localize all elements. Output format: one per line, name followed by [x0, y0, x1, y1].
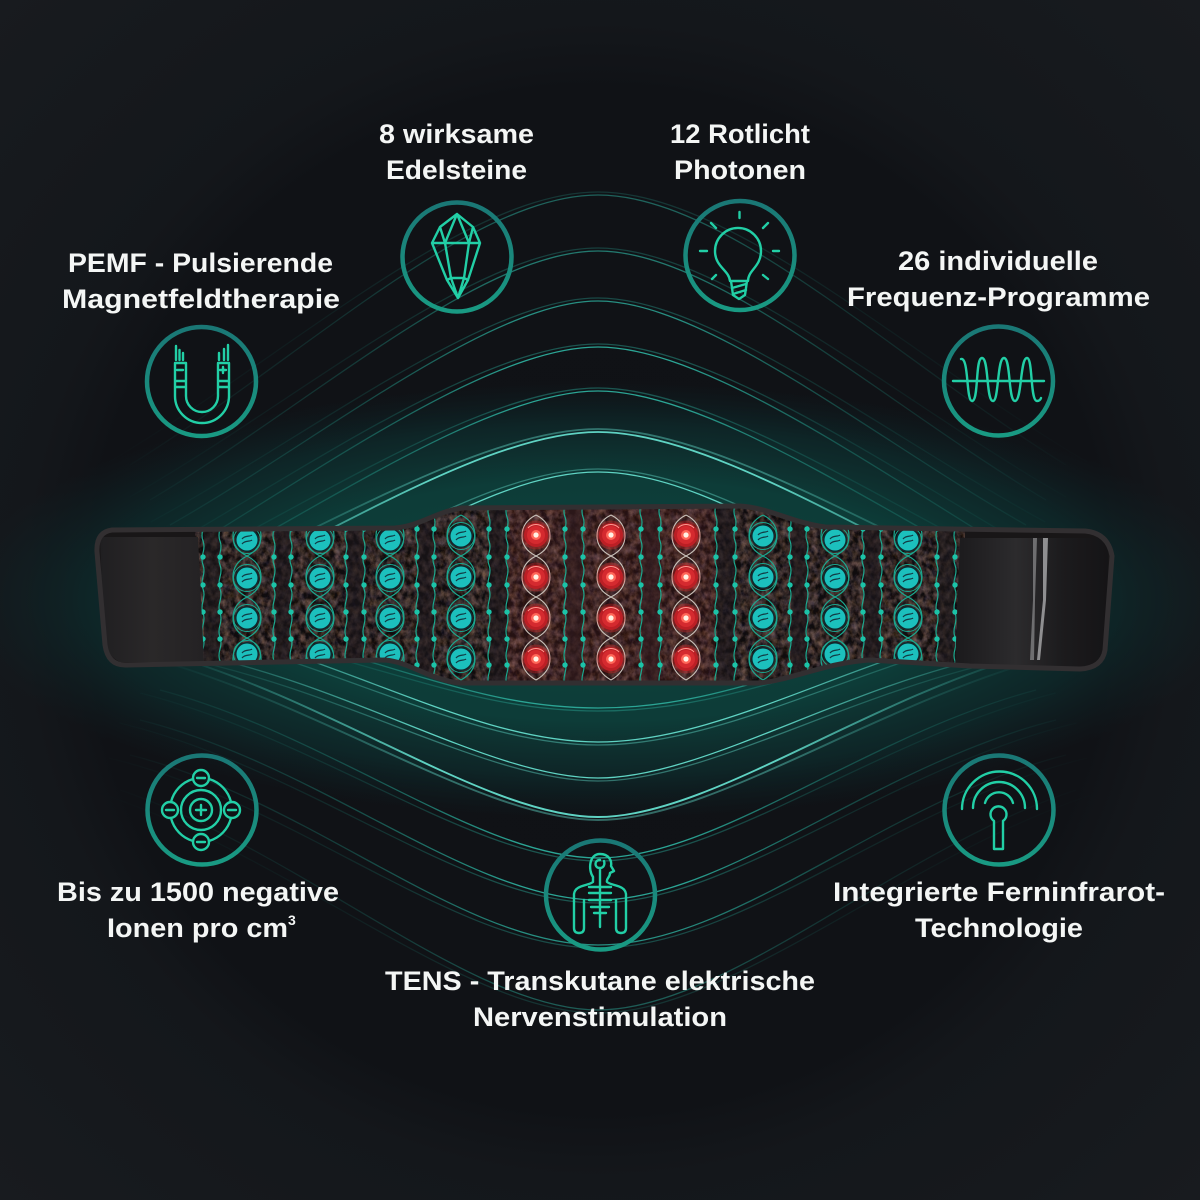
heading: Rotlicht — [670, 119, 810, 185]
heading: Frequenz-Programme: 26 individuelle — [898, 246, 1098, 276]
feature: PEMF — [62, 248, 340, 436]
energy wave lines above belt — [109, 192, 1087, 570]
heading: negative Ionen: Bis zu 1500 negative — [57, 877, 339, 907]
feature: Ferninfrarot — [833, 756, 1165, 943]
right pocket — [955, 538, 1056, 666]
heading: PEMF — [62, 248, 340, 314]
icon: magnet — [147, 327, 256, 436]
heading: Frequenz-Programme — [847, 246, 1150, 312]
feature: Edelsteine — [379, 119, 534, 312]
feature: negative Ionen — [57, 756, 339, 943]
icon: crystal — [402, 202, 512, 312]
heading: Ferninfrarot: Technologie — [915, 913, 1083, 943]
heading: Rotlicht: Photonen — [674, 155, 806, 185]
icon: light bulb — [686, 201, 794, 310]
heading: Ferninfrarot: Integrierte Ferninfrarot- — [833, 877, 1165, 907]
heading: TENS: Nervenstimulation — [473, 1002, 727, 1032]
feature: Rotlicht — [670, 119, 810, 310]
heading: TENS — [385, 966, 815, 1032]
belt border — [97, 506, 1112, 683]
heading: PEMF: PEMF - Pulsierende — [68, 248, 333, 278]
teal magnetic coils — [233, 515, 922, 680]
icon: ions — [148, 756, 256, 864]
heading: PEMF: Magnetfeldtherapie — [62, 284, 340, 314]
heading: Edelsteine: 8 wirksame — [379, 119, 534, 149]
icon: infrared antenna — [944, 756, 1054, 864]
icon: human body nerves — [546, 840, 655, 950]
gemstone texture — [195, 500, 965, 690]
heading: negative Ionen — [57, 877, 339, 943]
heading: TENS: TENS - Transkutane elektrische — [385, 966, 815, 996]
left pocket — [100, 537, 204, 662]
heading: Frequenz-Programme: Frequenz-Programme — [847, 282, 1150, 312]
heading: Ferninfrarot — [833, 877, 1165, 943]
heading: Edelsteine — [379, 119, 534, 185]
red light photons — [522, 515, 700, 680]
wavy copper lines — [200, 505, 958, 685]
icon: frequency wave — [944, 326, 1053, 436]
heading: negative Ionen: 3 — [288, 912, 296, 928]
therapy belt — [97, 500, 1112, 690]
heading: Rotlicht: 12 Rotlicht — [670, 119, 810, 149]
feature: Frequenz-Programme — [847, 246, 1150, 436]
heading: Edelsteine: Edelsteine — [386, 155, 527, 185]
heading: negative Ionen: Ionen pro cm — [107, 913, 288, 943]
teal glow behind belt — [0, 375, 1200, 825]
feature: TENS — [385, 840, 815, 1032]
energy wave lines below belt — [98, 650, 1098, 1013]
